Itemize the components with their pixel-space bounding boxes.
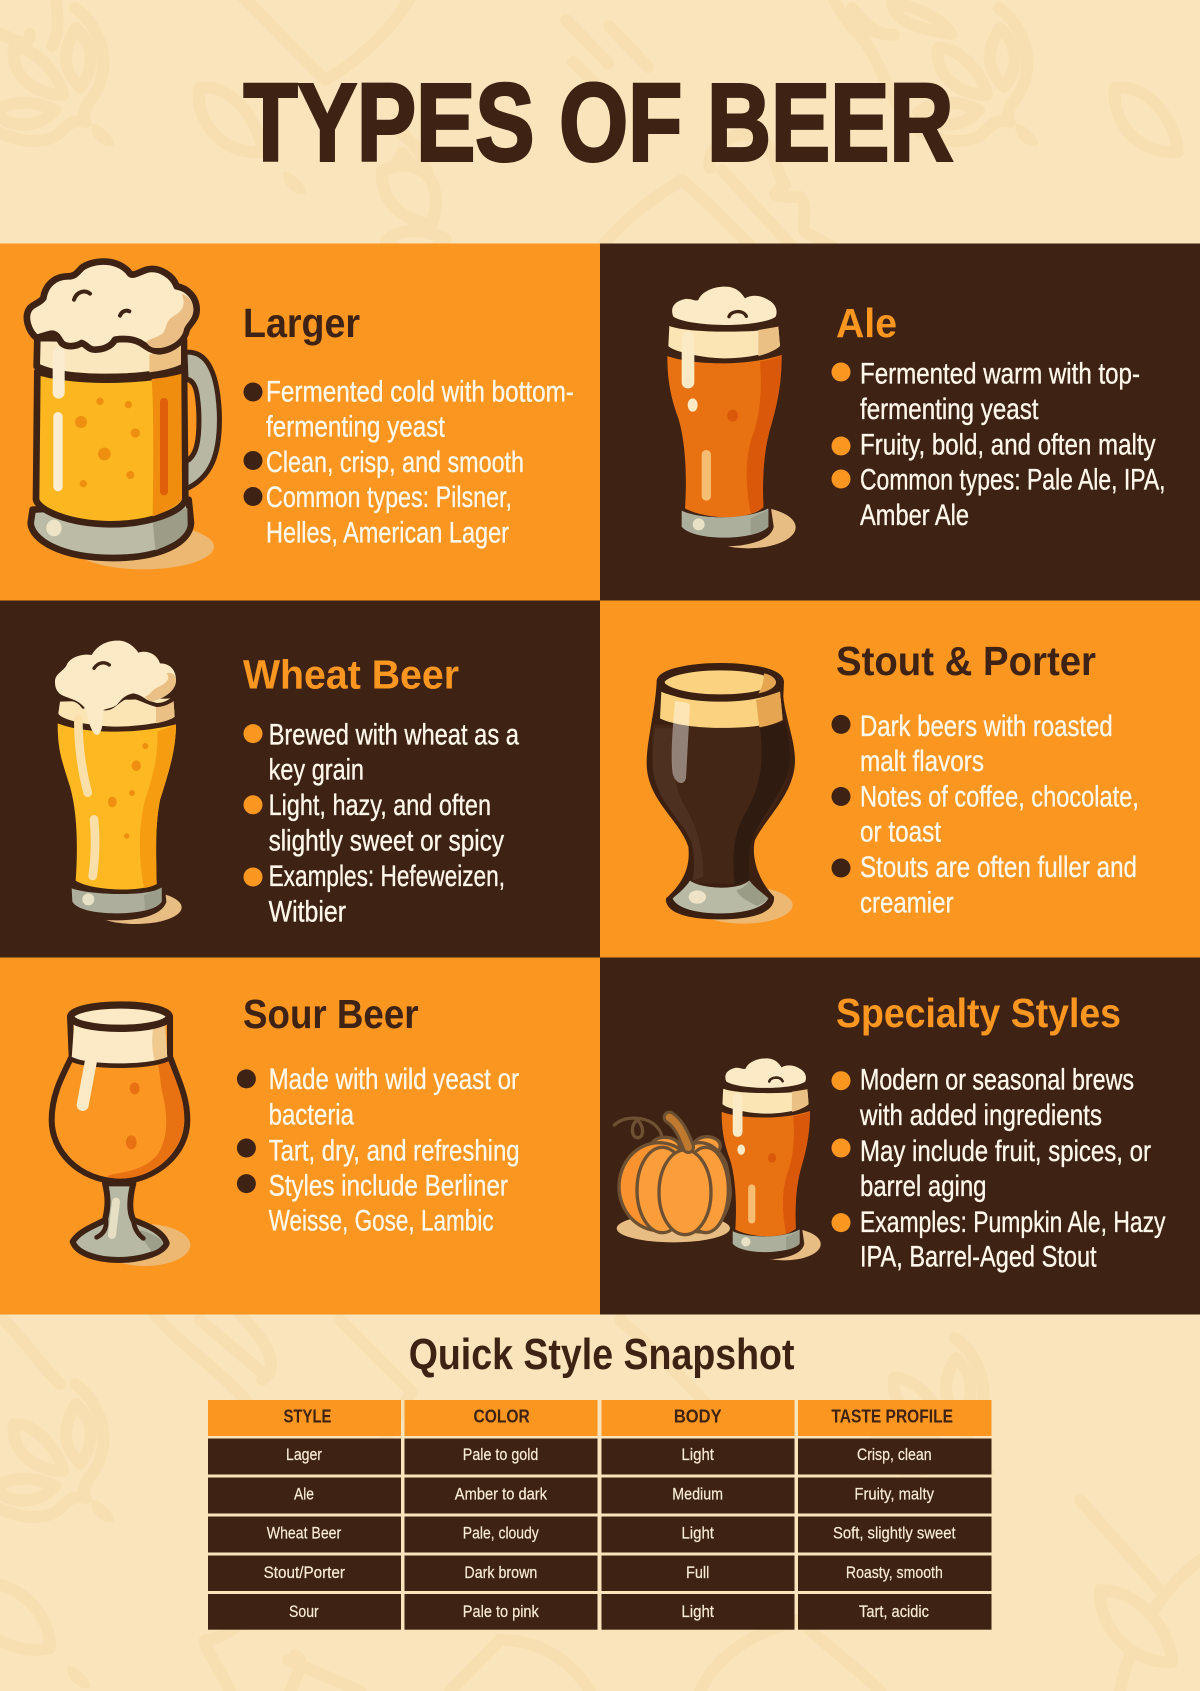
panel: Stout and Porter [600,600,1200,958]
table row: Sour: Pale to pink [463,1602,539,1621]
table row: Lager: Pale to gold [463,1445,538,1464]
bullet list [237,1063,520,1238]
table row: Ale: Ale [294,1484,314,1504]
bullet list [244,376,574,550]
bullet list [832,1064,1166,1274]
table row: Stout/Porter [208,1556,992,1591]
table row: Lager [208,1438,992,1474]
heading: Quick Style Snapshot: Quick Style Snapshot [409,1330,795,1379]
bullet list [244,718,519,928]
heading: Ale: Ale [836,300,897,346]
table row: Sour: Sour [289,1602,319,1621]
table row: Stout/Porter: Stout/Porter [264,1563,345,1582]
bullet list: barrel aging [860,1170,986,1203]
table row: Ale: Amber to dark [455,1484,547,1504]
table row: Sour: Tart, acidic [859,1602,929,1621]
bullet list: bacteria [269,1099,354,1132]
table row: Stout/Porter: Dark brown [464,1563,537,1582]
bullet list: Examples: Hefeweizen, [269,860,505,893]
bullet list: Fermented cold with bottom- [266,376,574,409]
bullet list: key grain [269,754,364,786]
panel: Ale [600,244,1200,600]
bullet list: Tart, dry, and refreshing [269,1134,520,1167]
bullet list: Styles include Berliner [269,1169,508,1202]
table header row: TASTE PROFILE [831,1407,953,1427]
bullet list: with added ingredients [859,1099,1102,1132]
table row: Sour: Light [681,1602,714,1621]
bullet list: Brewed with wheat as a [269,718,519,752]
bullet list: Clean, crisp, and smooth [266,446,524,479]
bullet list: slightly sweet or spicy [269,824,504,858]
table row: Stout/Porter: Roasty, smooth [846,1563,943,1582]
table row: Ale: Fruity, malty [854,1484,934,1504]
heading: Sour Beer: Sour Beer [243,991,419,1037]
table row: Lager: Light [681,1445,714,1464]
bullet list [832,710,1139,920]
panel: Wheat Beer [0,600,600,958]
table row: Wheat Beer: Soft, slightly sweet [833,1524,956,1542]
bullet list: fermenting yeast [266,411,446,444]
table row: Sour [208,1594,992,1630]
table row: Wheat Beer: Pale, cloudy [463,1524,539,1542]
panel: Specialty Styles [600,958,1200,1314]
heading: Larger: Larger [243,300,360,346]
table: style snapshot [208,1400,992,1630]
table row: Ale [208,1478,992,1514]
bullet list: creamier [860,887,954,920]
bullet list [832,358,1166,532]
icon: pumpkin and beer glass [614,1058,821,1260]
bullet list: Fermented warm with top- [860,358,1140,391]
bullet list: Weisse, Gose, Lambic [269,1205,494,1238]
bullet list: Helles, American Lager [266,516,509,550]
table header row: COLOR [474,1407,530,1427]
icon: wheat beer glass [55,641,182,924]
bullet list: Amber Ale [860,499,969,532]
table row: Lager: Crisp, clean [857,1445,932,1464]
bullet list: or toast [860,815,942,848]
bullet list: Common types: Pilsner, [266,481,512,514]
table header row [208,1400,992,1436]
bullet list: malt flavors [860,745,984,778]
table header row: BODY [674,1407,722,1427]
table row: Wheat Beer [208,1516,992,1552]
heading: Stout and Porter: Stout & Porter [836,638,1096,684]
table row: Lager: Lager [286,1445,322,1464]
icon: beer mug [27,262,219,569]
bullet list: fermenting yeast [860,393,1039,426]
heading: Specialty Styles: Specialty Styles [836,990,1121,1036]
heading: Wheat Beer: Wheat Beer [243,652,459,698]
bullet list: Stouts are often fuller and [860,851,1137,884]
title: TYPES OF BEER [244,62,954,184]
table header row: STYLE [284,1407,332,1427]
bullet list: Dark beers with roasted [860,710,1113,743]
icon: stout goblet [647,663,795,924]
panel: Sour Beer [0,958,600,1314]
bullet list: Made with wild yeast or [269,1063,519,1096]
table row: Wheat Beer: Wheat Beer [267,1524,341,1542]
table row: Wheat Beer: Light [681,1524,714,1542]
table row: Stout/Porter: Full [686,1563,709,1582]
bullet list: IPA, Barrel-Aged Stout [860,1240,1097,1274]
bullet list: Witbier [269,895,346,928]
icon: sour beer tulip glass [52,1005,190,1266]
icon: ale glass [667,287,796,548]
table row: Ale: Medium [672,1484,723,1504]
bullet list: Light, hazy, and often [269,789,491,822]
panel: Lager [0,244,600,600]
